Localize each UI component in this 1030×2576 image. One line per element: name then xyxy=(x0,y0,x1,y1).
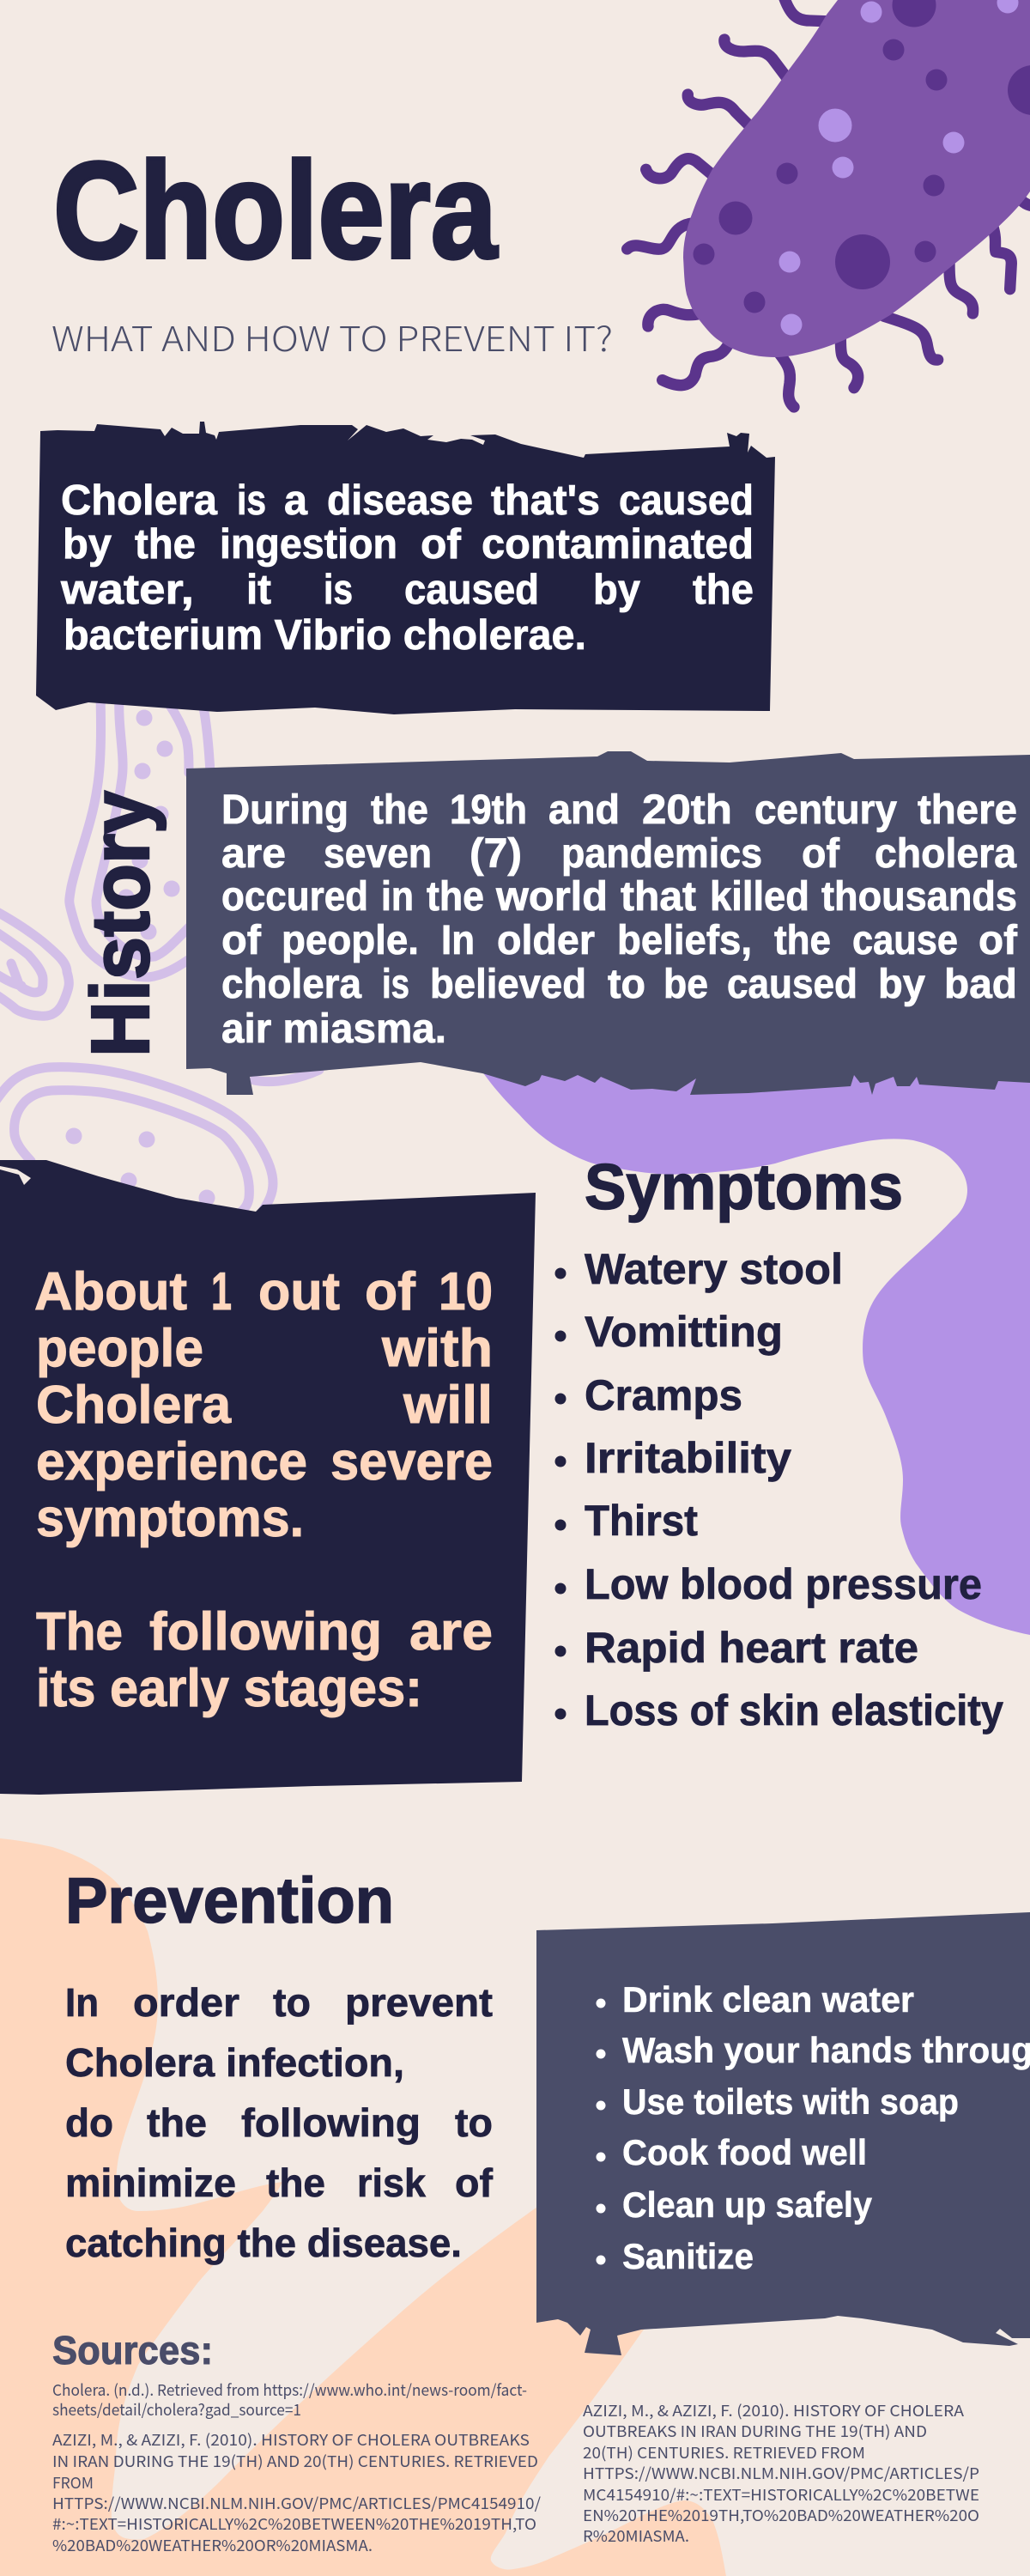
history text: beliefs, xyxy=(617,918,752,963)
text block: source two repeat: R%20MIASMA. xyxy=(583,2524,689,2547)
heading: history: History xyxy=(75,791,167,1057)
history text: the xyxy=(774,918,831,963)
text block: source two repeat: 20(TH) CENTURIES. RETRIEVED FROM xyxy=(583,2441,865,2464)
severity text: out xyxy=(258,1262,340,1321)
bacterium light spots xyxy=(779,0,1018,335)
definition text: caused xyxy=(619,477,754,524)
list: symptoms: Watery stool xyxy=(585,1245,843,1293)
history text: bad xyxy=(944,962,1017,1007)
history text: and xyxy=(548,787,620,833)
text block: source two repeat: AZIZI, M., & AZIZI, F. (2010). HISTORY OF CHOLERA xyxy=(583,2399,964,2421)
history text: be xyxy=(663,962,708,1007)
text block: source two: FROM xyxy=(52,2471,94,2494)
list: symptoms: Thirst xyxy=(585,1497,698,1545)
history text: of xyxy=(221,918,262,963)
definition text: a xyxy=(284,477,308,524)
severity background xyxy=(0,1160,536,1795)
panel: prevention steps xyxy=(536,1912,1030,2355)
severity text: 10 xyxy=(439,1262,493,1321)
panel: history xyxy=(186,751,1030,1095)
prevention list: Sanitize xyxy=(622,2236,754,2276)
text block: source two: AZIZI, M., & AZIZI, F. (2010). HISTORY OF CHOLERA OUTBREAKS xyxy=(52,2428,530,2451)
history text: killed xyxy=(710,874,809,920)
history text: 20th xyxy=(642,787,732,833)
severity text: are xyxy=(409,1602,493,1662)
history text: thousands xyxy=(821,874,1017,920)
definition text: contaminated xyxy=(482,521,754,568)
title: Cholera xyxy=(53,133,498,287)
definition background xyxy=(36,422,775,714)
history text: pandemics xyxy=(561,831,762,877)
severity text: of xyxy=(365,1262,415,1321)
severity text: following xyxy=(149,1602,382,1662)
history text: by xyxy=(878,962,925,1007)
severity text: its early stages: xyxy=(36,1659,422,1718)
definition text: bacterium Vibrio cholerae. xyxy=(64,612,586,659)
text block: prevention intro: Cholera infection, xyxy=(65,2040,404,2085)
severity text: The xyxy=(36,1602,123,1662)
definition text xyxy=(60,477,754,659)
prevention background xyxy=(536,1912,1030,2355)
decoration: pale lavender dots xyxy=(65,709,215,1206)
definition text: of xyxy=(421,521,462,568)
text block: prevention intro: order xyxy=(133,1980,239,2025)
text block: prevention intro: In xyxy=(65,1980,99,2025)
panel: definition xyxy=(36,422,775,714)
text block: prevention intro: risk xyxy=(357,2160,426,2205)
definition text: that's xyxy=(491,477,600,524)
text block: source two: %20BAD%20WEATHER%20OR%20MIASMA. xyxy=(52,2534,373,2556)
text block: source two repeat: HTTPS://WWW.NCBI.NLM.NIH.GOV/PMC/ARTICLES/P xyxy=(583,2462,979,2484)
history text: cause xyxy=(852,918,958,963)
text block: source two repeat: MC4154910/#:~:TEXT=HISTORICALLY%2C%20BETWE xyxy=(583,2483,979,2506)
bacterium body xyxy=(683,0,1030,357)
list: symptoms: Cramps xyxy=(585,1371,742,1419)
text block: source two repeat: EN%20THE%2019TH,TO%20BAD%20WEATHER%20O xyxy=(583,2504,979,2526)
bacterium flagella xyxy=(627,0,1030,407)
heading: prevention: Prevention xyxy=(65,1864,394,1936)
history text: seven xyxy=(324,831,432,877)
subtitle: WHAT AND HOW TO PREVENT IT? xyxy=(52,312,613,361)
text block: prevention intro xyxy=(65,1980,494,2265)
text block: prevention intro: the xyxy=(147,2100,207,2145)
history text: world xyxy=(495,874,608,920)
list: symptoms: Irritability xyxy=(585,1434,791,1482)
text block: prevention intro: prevent xyxy=(345,1980,493,2025)
history text: believed xyxy=(430,962,586,1007)
text block: prevention intro: of xyxy=(455,2160,494,2205)
text block: source two xyxy=(52,2428,541,2556)
bacterium dark spots xyxy=(694,0,1030,313)
definition text: the xyxy=(135,521,196,568)
definition text: is xyxy=(324,567,353,613)
prevention list: Cook food well xyxy=(622,2132,867,2172)
severity text: experience xyxy=(36,1432,307,1492)
prevention list: Use toilets with soap xyxy=(622,2081,959,2122)
severity text: symptoms. xyxy=(36,1489,304,1548)
text block: prevention intro: catching the disease. xyxy=(65,2221,462,2265)
severity text: Cholera xyxy=(36,1376,232,1435)
severity text: will xyxy=(403,1376,493,1435)
history text: cholera xyxy=(221,962,361,1007)
text block: source one xyxy=(52,2379,527,2421)
text block: prevention intro: following xyxy=(241,2100,421,2145)
history text: cholera xyxy=(875,831,1016,877)
decoration: lavender blob behind symptoms xyxy=(472,1056,1030,1635)
decoration: pale lavender bacteria outlines xyxy=(0,696,319,1212)
list: symptoms: Vomitting xyxy=(585,1308,783,1356)
text block: source one: Cholera. (n.d.). Retrieved from https://www.who.int/news-room/fact- xyxy=(52,2379,527,2401)
heading: symptoms: Symptoms xyxy=(585,1151,903,1223)
list: symptoms: Rapid heart rate xyxy=(585,1624,918,1672)
history text: are xyxy=(221,831,286,877)
history text: 19th xyxy=(450,787,527,833)
history text: caused xyxy=(727,962,857,1007)
prevention list: Drink clean water xyxy=(622,1979,914,2020)
text block: source one: sheets/detail/cholera?gad_source=1 xyxy=(52,2398,301,2421)
history text: people. xyxy=(282,918,419,963)
definition text: disease xyxy=(327,477,473,524)
definition text: it xyxy=(246,567,271,613)
history text: to xyxy=(608,962,645,1007)
list: symptoms: Low blood pressure xyxy=(585,1560,982,1608)
severity text: About xyxy=(34,1262,187,1321)
definition text: by xyxy=(63,521,112,568)
history text xyxy=(221,787,1018,1052)
history text: the xyxy=(427,874,484,920)
history text: century xyxy=(754,787,897,833)
history text: of xyxy=(978,918,1018,963)
history text: During xyxy=(221,787,348,833)
list: symptoms: Loss of skin elasticity xyxy=(585,1686,1003,1735)
severity text: people xyxy=(36,1319,203,1378)
severity text: severe xyxy=(330,1432,493,1492)
text block: source two: HTTPS://WWW.NCBI.NLM.NIH.GOV/PMC/ARTICLES/PMC4154910/ xyxy=(52,2492,541,2514)
definition text: Cholera xyxy=(61,477,218,524)
history text: in xyxy=(381,874,414,920)
history background xyxy=(186,751,1030,1095)
definition text: ingestion xyxy=(220,521,397,568)
definition text: is xyxy=(237,477,266,524)
decoration: peach blobs behind prevention and sources xyxy=(0,1838,726,2576)
history text: the xyxy=(371,787,428,833)
text block: prevention intro: to xyxy=(455,2100,493,2145)
severity tear detail xyxy=(0,1166,31,1185)
history text: In xyxy=(441,918,475,963)
prevention list: Clean up safely xyxy=(622,2184,873,2225)
text block: source two: IN IRAN DURING THE 19(TH) AND 20(TH) CENTURIES. RETRIEVED xyxy=(52,2450,538,2472)
history text: of xyxy=(802,831,840,877)
text block: prevention intro: the xyxy=(266,2160,325,2205)
history text: (7) xyxy=(470,831,522,877)
history text: is xyxy=(382,962,409,1007)
list: symptoms xyxy=(554,1245,1003,1735)
severity text: with xyxy=(381,1319,493,1378)
definition text: caused xyxy=(404,567,539,613)
history text: there xyxy=(918,787,1017,833)
definition text: water, xyxy=(60,567,194,613)
text block: prevention intro: to xyxy=(273,1980,311,2025)
prevention list xyxy=(596,1979,1030,2276)
text block: prevention intro: do xyxy=(65,2100,113,2145)
text block: prevention intro: minimize xyxy=(65,2160,236,2205)
text block: source two repeat: OUTBREAKS IN IRAN DURING THE 19(TH) AND xyxy=(583,2420,927,2442)
definition text: the xyxy=(693,567,754,613)
heading: sources: Sources: xyxy=(52,2328,213,2372)
history text: that xyxy=(621,874,696,920)
severity text xyxy=(34,1262,493,1718)
severity text: 1 xyxy=(211,1262,232,1321)
text block: source two repeat xyxy=(583,2399,979,2547)
panel: severity xyxy=(0,1160,536,1795)
history text: occured xyxy=(221,874,368,920)
definition text: by xyxy=(593,567,640,613)
history text: air miasma. xyxy=(221,1006,446,1052)
history text: older xyxy=(497,918,595,963)
text block: source two: #:~:TEXT=HISTORICALLY%2C%20BETWEEN%20THE%2019TH,TO xyxy=(52,2512,536,2535)
icon: purple bacterium xyxy=(627,0,1030,407)
